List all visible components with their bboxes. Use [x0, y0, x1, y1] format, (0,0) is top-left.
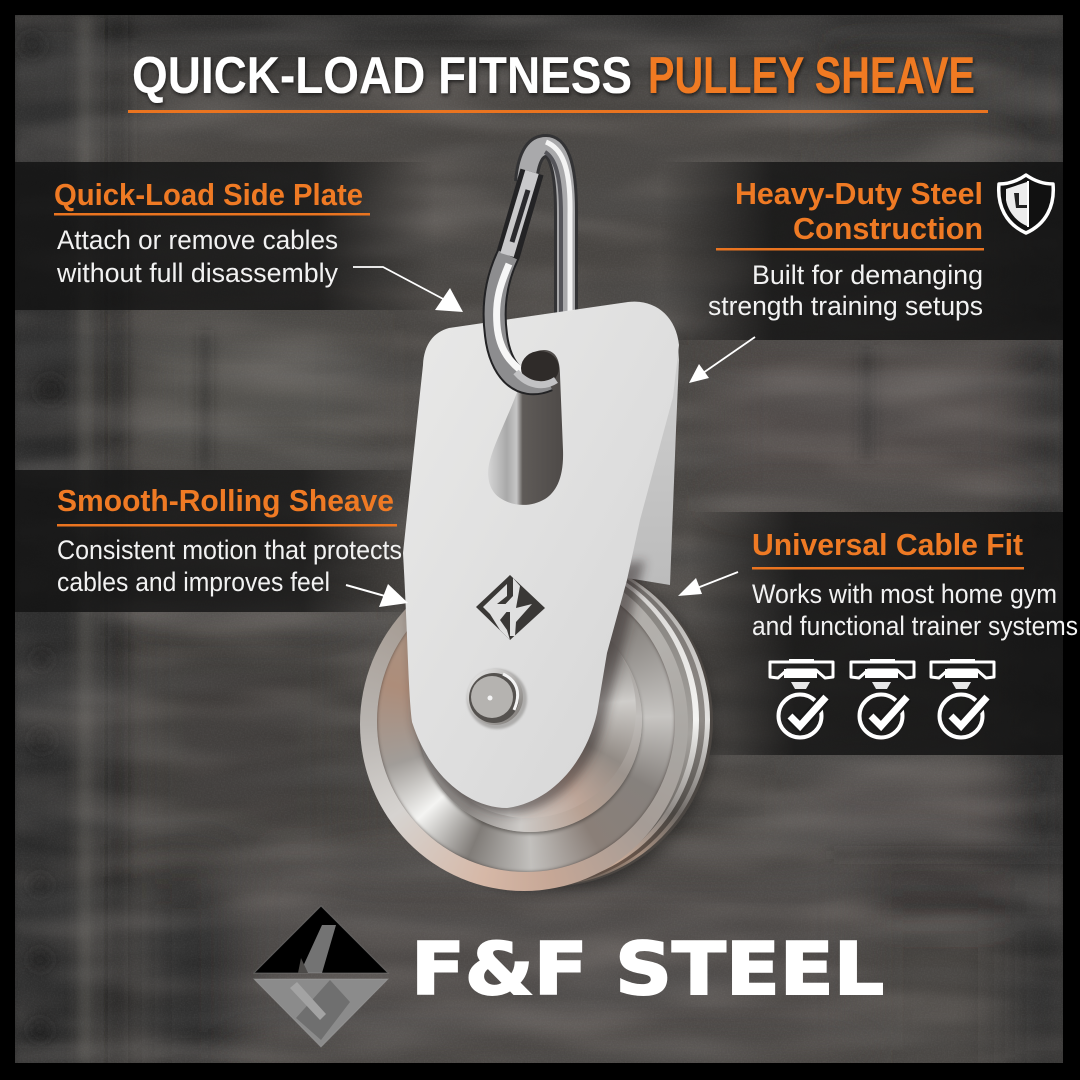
- title: QUICK-LOAD FITNESS: [132, 47, 632, 105]
- brand logo mark: [254, 906, 388, 1047]
- front plate: [403, 302, 679, 808]
- axle bolt: [467, 669, 527, 729]
- icon: cable check 2: [851, 659, 914, 738]
- title: [132, 47, 975, 105]
- callout: heavy-duty steel construction: strength training setups: [708, 291, 983, 321]
- callout: smooth-rolling sheave: cables and improves feel: [57, 567, 330, 597]
- back plate: [627, 345, 679, 585]
- plate slot: [488, 350, 563, 505]
- icon: cable check 3: [931, 659, 994, 738]
- callout: smooth-rolling sheave: Consistent motion that protects: [57, 535, 402, 565]
- arrow: to sheave: [346, 584, 408, 607]
- callout: heavy-duty steel construction: Heavy-Duty Steel: [735, 176, 983, 211]
- panel: smooth-rolling backdrop: [15, 470, 415, 612]
- title: PULLEY SHEAVE: [648, 47, 975, 105]
- panel: quick-load backdrop: [15, 162, 435, 310]
- logo cutout on plate: [476, 575, 545, 640]
- arrow: to side plate: [353, 267, 463, 312]
- callout: smooth-rolling sheave: [57, 483, 402, 597]
- callout: universal cable fit: [752, 527, 1078, 641]
- callout: heavy-duty steel construction: [708, 176, 984, 321]
- panel: universal cable backdrop: [690, 512, 1063, 755]
- callout: universal cable fit: Universal Cable Fit: [752, 527, 1023, 562]
- callout: smooth-rolling sheave: Smooth-Rolling Sheave: [57, 483, 394, 518]
- plate shadow on sheave: [410, 560, 645, 814]
- callout: quick-load side plate: [54, 177, 370, 288]
- callout: heavy-duty steel construction: Built for demanging: [752, 260, 983, 290]
- icon: cable check 1: [770, 659, 833, 738]
- icon: shield: [999, 175, 1053, 233]
- brand name: F&F STEEL: [411, 927, 884, 1011]
- panel: heavy-duty backdrop: [660, 162, 1063, 340]
- pulley wheel: brushed steel sheave: [360, 578, 718, 900]
- arrow: to steel construction: [689, 337, 755, 383]
- carabiner front gate and hook: [495, 172, 559, 385]
- callout: heavy-duty steel construction: Construction: [793, 211, 983, 246]
- title underline: [128, 110, 988, 113]
- callout: quick-load side plate: without full disassembly: [56, 258, 338, 288]
- callout: universal cable fit: Works with most home gym: [752, 579, 1057, 609]
- carabiner rear leg: [526, 142, 570, 315]
- callout: quick-load side plate: Quick-Load Side Plate: [54, 177, 363, 212]
- callout: quick-load side plate: Attach or remove cables: [57, 225, 338, 255]
- arrow: to cable groove: [678, 572, 738, 596]
